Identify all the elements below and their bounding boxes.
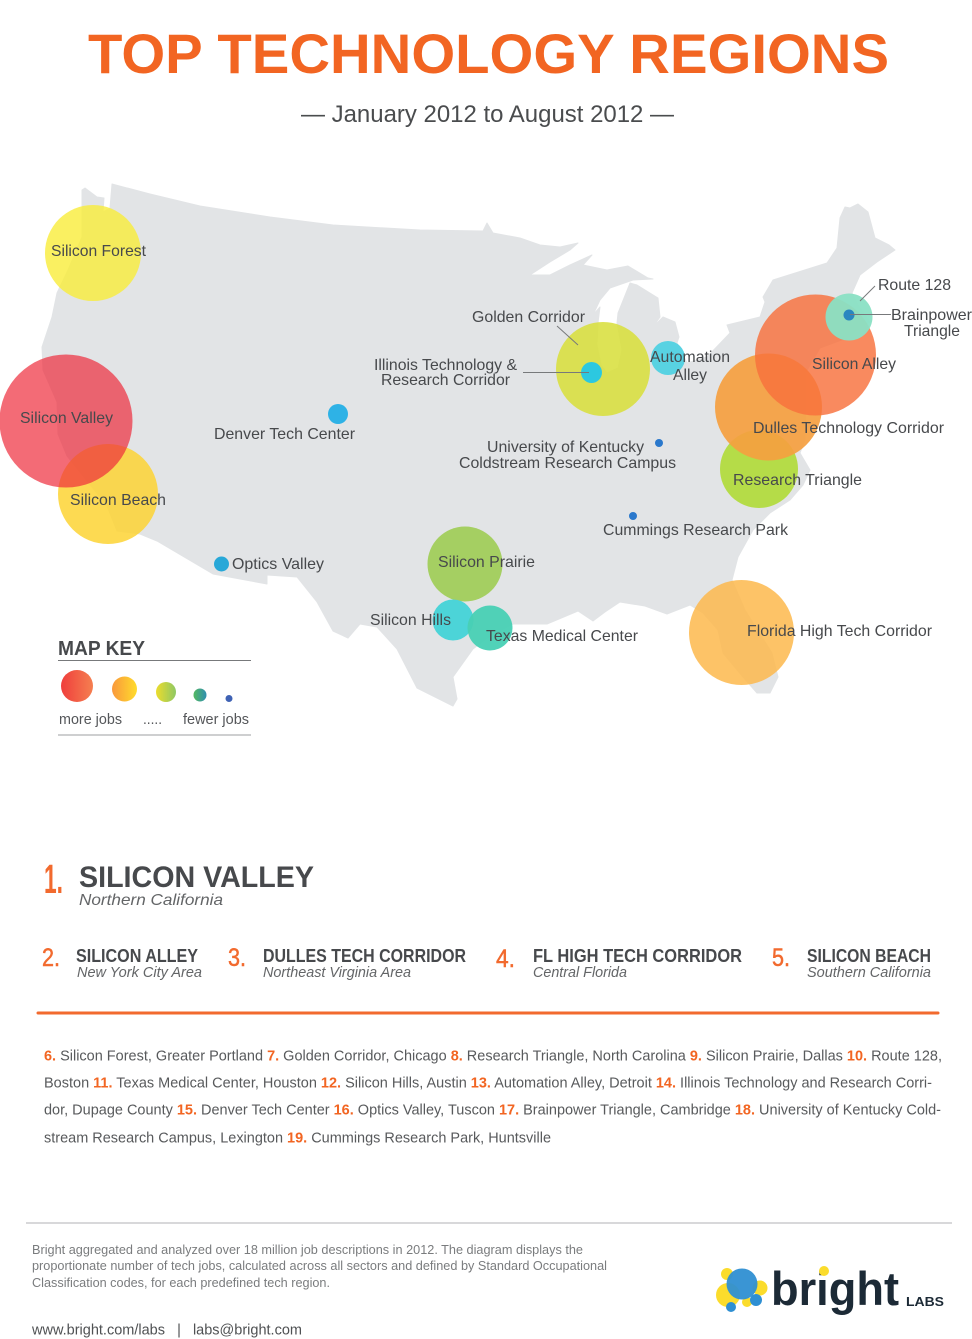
- label: Automation Alley: [650, 349, 730, 384]
- circle: University of Kentucky Coldstream: [655, 439, 663, 447]
- circle: Research Triangle: [720, 430, 798, 508]
- label: Brainpower Triangle: Triangle: [904, 323, 960, 340]
- rank 5: Silicon Beach: [772, 944, 931, 981]
- leader lines: [523, 286, 891, 372]
- name: DULLES TECH CORRIDOR: [263, 946, 466, 966]
- label: Research Triangle: Research Triangle: [733, 472, 862, 489]
- ranked list 6 to 19: Boston 11. Texas Medical Center, Houston 12. Silicon Hills, Austin 13. Automation Alley, Detroit 14. Illinois Technology and Research Corri-: [44, 1076, 932, 1092]
- label: Brainpower Triangle: Brainpower: [891, 307, 972, 324]
- label: Illinois Technology and Research Corridor: [374, 357, 517, 389]
- label: Optics Valley: Optics Valley: [232, 556, 324, 573]
- name: SILICON BEACH: [807, 946, 931, 966]
- number 5: 5.: [772, 944, 790, 972]
- map labels: [20, 243, 972, 645]
- name: SILICON ALLEY: [76, 946, 198, 966]
- map key heading: MAP KEY: [58, 637, 145, 660]
- yellow dot on the i: [819, 1266, 829, 1276]
- circle: Silicon Beach: [58, 444, 158, 544]
- label: Route 128: Route 128: [878, 277, 951, 294]
- circle: Silicon Alley: [755, 294, 876, 416]
- circle: Denver Tech Center: [328, 404, 348, 424]
- map key: [58, 637, 251, 735]
- label: University of Kentucky Coldstream Research Campus: [459, 439, 676, 472]
- number 3: 3.: [228, 944, 246, 972]
- label: Silicon Hills: Silicon Hills: [370, 612, 451, 629]
- label: Silicon Prairie: Silicon Prairie: [438, 554, 535, 571]
- label: Silicon Alley: Silicon Alley: [812, 356, 896, 373]
- label: Silicon Valley: Silicon Valley: [20, 410, 113, 427]
- methodology note: [32, 1243, 607, 1290]
- LABS: LABS: [906, 1294, 944, 1309]
- label: Texas Medical Center: Texas Medical Center: [486, 628, 639, 645]
- location: Northeast Virginia Area: [263, 964, 411, 981]
- label: Illinois Technology and Research Corridor: Research Corridor: [381, 372, 511, 389]
- rank 2: Silicon Alley: [42, 944, 202, 981]
- logo: Bright Labs: [716, 1262, 944, 1315]
- label: Cummings Research Park: Cummings Research Park: [603, 522, 789, 539]
- circle: Optics Valley: [214, 556, 229, 572]
- key circles: [61, 670, 232, 702]
- label: University of Kentucky Coldstream Research Campus: University of Kentucky: [487, 439, 644, 456]
- location: Southern California: [807, 964, 931, 981]
- circle: Illinois Technology and Research Corridor: [581, 362, 602, 383]
- key label: ellipsis: .....: [143, 712, 162, 728]
- label: Automation Alley: Automation: [650, 349, 730, 366]
- name: SILICON VALLEY: [79, 861, 314, 894]
- contact links: www.bright.com/labs | labs@bright.com: [31, 1322, 302, 1338]
- ranked list 6 to 19: dor, Dupage County 15. Denver Tech Center 16. Optics Valley, Tuscon 17. Brainpower Triangle, Cambridge 18. University of Kentucky Cold-: [44, 1102, 941, 1118]
- circle: Dulles Technology Corridor: [715, 354, 822, 460]
- ranked list 6 to 19: 6. Silicon Forest, Greater Portland 7. Golden Corridor, Chicago 8. Research Triangle, North Carolina 9. Silicon Prairie, Dallas 10. Route 128,: [44, 1048, 942, 1064]
- circle: Silicon Prairie: [428, 526, 502, 602]
- key label: more jobs: more jobs: [59, 712, 122, 728]
- label: Illinois Technology and Research Corridor: Illinois Technology &: [374, 357, 517, 374]
- rank 3: Dulles Tech Corridor: [228, 944, 466, 981]
- region circles: [0, 205, 876, 685]
- ranked list 6 to 19: stream Research Campus, Lexington 19. Cummings Research Park, Huntsville: [44, 1130, 551, 1146]
- methodology note: Classification codes, for each predefined tech region.: [32, 1276, 330, 1290]
- wordmark: bright: [771, 1262, 899, 1315]
- label: Automation Alley: Alley: [673, 367, 707, 384]
- location: Northern California: [79, 892, 223, 909]
- rank 4: FL High Tech Corridor: [496, 945, 742, 981]
- number 4: 4.: [496, 945, 515, 973]
- circle: Brainpower Triangle: [844, 310, 854, 320]
- label: Golden Corridor: Golden Corridor: [472, 309, 586, 326]
- circle: Silicon Hills: [432, 600, 474, 640]
- name: FL HIGH TECH CORRIDOR: [533, 946, 742, 966]
- methodology note: Bright aggregated and analyzed over 18 million job descriptions in 2012. The diagram displays the: [32, 1243, 583, 1257]
- ranked list 6 to 19: [44, 1048, 942, 1146]
- subtitle: date range: — January 2012 to August 2012 —: [301, 101, 674, 128]
- label: Brainpower Triangle: [891, 307, 972, 340]
- methodology note: proportionate number of tech jobs, calculated across all sectors and defined by Standard Occupational: [32, 1259, 607, 1273]
- circle: Cummings Research Park: [629, 512, 637, 520]
- location: New York City Area: [77, 964, 202, 981]
- map of the United States: [42, 184, 895, 706]
- title: TOP TECHNOLOGY REGIONS: [88, 22, 889, 85]
- label: Florida High Tech Corridor: Florida High Tech Corridor: [747, 623, 933, 640]
- location: Central Florida: [533, 964, 627, 981]
- icon: overlapping circles: [716, 1268, 768, 1312]
- key label: fewer jobs: fewer jobs: [183, 712, 249, 728]
- circle: Route 128: [826, 294, 872, 340]
- label: Denver Tech Center: Denver Tech Center: [214, 426, 356, 443]
- circle: Silicon Valley: [0, 354, 132, 488]
- circle: Silicon Forest: [45, 205, 141, 301]
- label: Silicon Beach: Silicon Beach: [70, 492, 166, 509]
- rank 1: Silicon Valley: [44, 856, 314, 909]
- number 2: 2.: [42, 944, 60, 972]
- label: Dulles Technology Corridor: Dulles Technology Corridor: [753, 420, 945, 437]
- label: University of Kentucky Coldstream Research Campus: Coldstream Research Campus: [459, 455, 676, 472]
- number 1: 1.: [44, 856, 63, 902]
- circle: Texas Medical Center: [468, 606, 512, 650]
- label: Silicon Forest: Silicon Forest: [51, 243, 147, 260]
- circle: Automation Alley: [651, 341, 685, 375]
- circle: Florida High Tech Corridor: [689, 580, 794, 685]
- circle: Golden Corridor: [556, 322, 650, 416]
